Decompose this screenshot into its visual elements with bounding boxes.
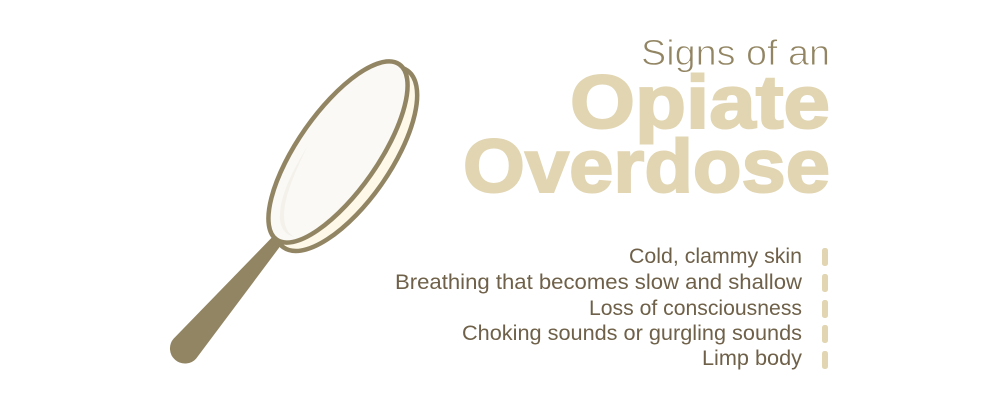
magnifier handle [170,235,282,363]
list item: choking: Choking sounds or gurgling sounds [462,322,802,345]
icon: magnifying glass [170,41,443,363]
magnifier lens [244,41,432,263]
heading: Opiate Overdose [463,60,830,208]
heading line: Opiate: Opiate [570,60,830,144]
list item: breathing: Breathing that becomes slow and shallow [395,271,803,294]
list item: cold skin: Cold, clammy skin [629,245,802,268]
heading line: Overdose: Overdose [463,124,830,208]
list: overdose signs [395,245,803,370]
magnifier back rim [248,45,443,273]
list bullet bars [822,248,828,369]
heading: Signs of an: Signs of an [641,32,830,73]
list item: limp body: Limp body [702,347,803,370]
list item: consciousness: Loss of consciousness [589,297,802,320]
lens highlight [280,147,307,237]
